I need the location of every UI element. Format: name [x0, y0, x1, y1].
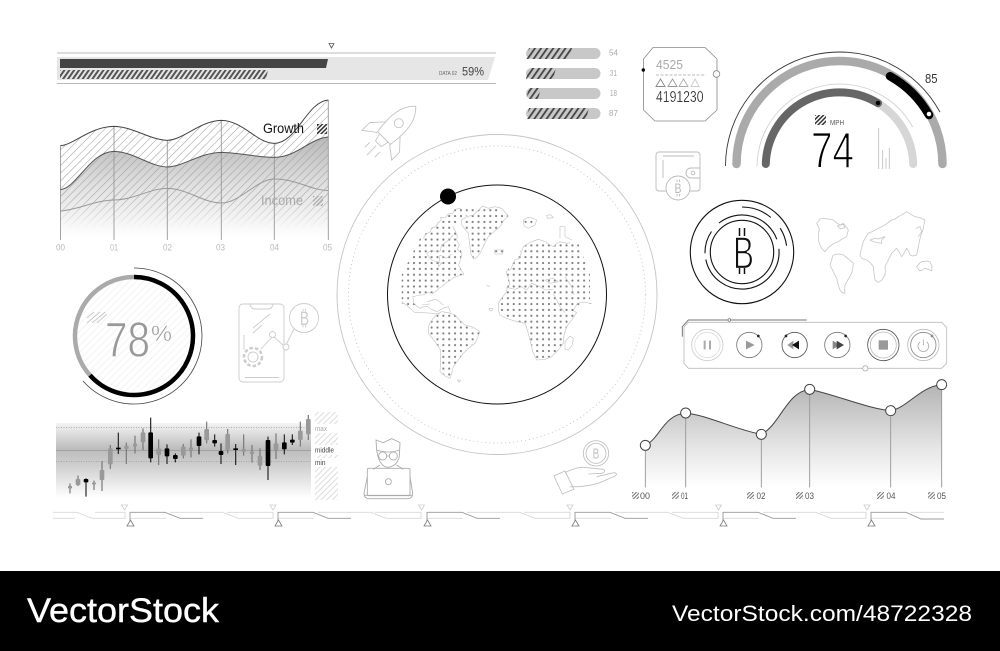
- chart vertical axes: [60, 100, 328, 240]
- ring outer thin arc: [83, 268, 202, 404]
- unit label: MPH: [830, 118, 844, 127]
- icon: hand holding bitcoin: B: [593, 447, 599, 463]
- map dot fill: [402, 205, 592, 378]
- timeline segment 3: [418, 505, 570, 526]
- dark progress bar: [60, 59, 328, 68]
- point labels: 04: [886, 491, 896, 502]
- timeline segment 4: [567, 505, 718, 526]
- code 4525: 4525: [656, 57, 683, 72]
- next button: [825, 332, 850, 358]
- timeline segment 2: [270, 505, 421, 526]
- line chart with points: [632, 380, 947, 502]
- ring gray part: [75, 277, 134, 375]
- bar 31: 31: [610, 68, 617, 78]
- bar 54: 54: [609, 48, 618, 58]
- point labels: 01: [681, 491, 688, 502]
- middle curve: [60, 137, 328, 190]
- percentage ring: [75, 268, 202, 404]
- candlestick chart: [56, 412, 338, 500]
- media control panel: [682, 319, 947, 371]
- top progress panel: [57, 44, 496, 84]
- x axis labels: 02: [163, 242, 172, 252]
- icon: phone with gear and bitcoin: B: [300, 309, 309, 330]
- icon: hand holding bitcoin: [554, 441, 616, 494]
- candles: [68, 415, 311, 497]
- chart background: [56, 423, 311, 498]
- small world map outline: [817, 212, 932, 293]
- inner light arc: [878, 103, 913, 164]
- income curve: [60, 179, 328, 211]
- icon: rocket: [352, 91, 431, 170]
- income label: Income: [261, 192, 303, 208]
- x axis labels: [56, 242, 332, 252]
- candle legend: [315, 412, 338, 500]
- timeline segment 5: [716, 505, 866, 526]
- growth label: Growth: [263, 120, 304, 136]
- image reference: VectorStock.com/48722328: [672, 601, 972, 626]
- dotted world map: [402, 205, 592, 382]
- candle legend: middle: [315, 448, 334, 454]
- candle legend: max: [315, 426, 327, 433]
- curve: [645, 385, 942, 445]
- icon: wallet with bitcoin: B: [674, 180, 682, 196]
- triangles row: [656, 79, 699, 86]
- x axis labels: 01: [110, 242, 118, 252]
- footer band: [0, 571, 1000, 651]
- central globe: [337, 134, 657, 454]
- power button: [908, 329, 939, 361]
- inner black ring: [388, 185, 606, 404]
- point labels: 00: [640, 491, 650, 502]
- drop lines: [645, 385, 942, 487]
- x axis labels: 05: [323, 242, 332, 252]
- gauge max value: 85: [925, 72, 938, 86]
- point labels: 05: [937, 491, 946, 502]
- outer gray arc: [736, 61, 942, 164]
- point labels: 03: [805, 491, 814, 502]
- outer thin arc: [726, 52, 940, 166]
- percent value: 59%: [462, 64, 484, 78]
- icon: wallet with bitcoin: [656, 152, 700, 200]
- speed value: 74: [811, 122, 854, 179]
- hatched progress bar: [60, 70, 268, 79]
- bottom timeline track: [53, 505, 944, 526]
- pause button: [692, 329, 723, 361]
- bar 87: 87: [609, 108, 618, 118]
- icon: phone with gear and bitcoin: [239, 304, 318, 382]
- growth curve: [60, 100, 328, 146]
- x axis labels: 00: [56, 242, 65, 252]
- code 4191230: 4191230: [656, 89, 704, 106]
- timeline segment 1: [122, 505, 273, 526]
- dotted ring: [348, 146, 646, 443]
- play button: [737, 332, 762, 358]
- horizontal percentage bars: [526, 48, 618, 119]
- octagonal data card: [642, 48, 720, 121]
- small bars: [879, 128, 889, 169]
- candle legend: min: [315, 460, 326, 467]
- bitcoin symbol: B: [733, 228, 754, 278]
- previous button: [782, 332, 807, 358]
- percent value: 78: [105, 314, 150, 368]
- outer black arc: [890, 76, 929, 115]
- timeline segment 6: [864, 505, 944, 526]
- data points: [640, 380, 947, 450]
- orbit marker: [440, 188, 456, 204]
- x axis labels: 03: [216, 242, 225, 252]
- point labels: 02: [756, 491, 766, 502]
- bitcoin coin: [690, 200, 794, 304]
- bar 18: 18: [610, 88, 617, 98]
- outer ring: [337, 134, 657, 454]
- point labels: [632, 491, 946, 502]
- ring black part: [90, 277, 193, 395]
- data label: DATA 02: [439, 71, 457, 77]
- area chart: growth and income: [56, 100, 332, 252]
- panel marker triangle: [329, 44, 334, 48]
- stop button: [868, 329, 899, 361]
- percent sign: %: [151, 321, 172, 346]
- icon: man with laptop: [364, 439, 413, 499]
- x axis labels: 04: [270, 242, 279, 252]
- speedometer gauge: [726, 52, 942, 179]
- inner dark arc: [766, 92, 878, 164]
- area under curve: [645, 385, 942, 487]
- inner thin arc: [757, 84, 913, 166]
- brand name: VectorStock: [27, 592, 220, 630]
- map coastlines: [402, 206, 592, 382]
